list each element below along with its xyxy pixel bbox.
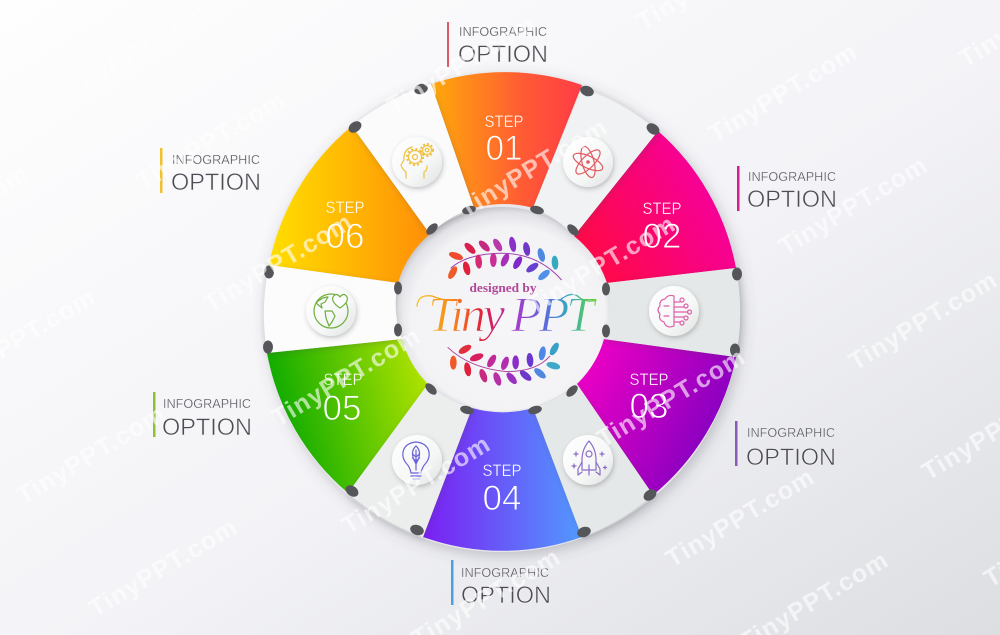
option: top: INFOGRAPHIC [459,24,547,39]
step 05 label: 05 [322,389,362,428]
step 06 label [326,198,364,256]
option: lower left: OPTION [162,414,252,441]
icon badges [306,137,699,485]
panel: bulb [348,384,472,537]
watermarks: TinyPPT.com [592,343,750,453]
script swashes [417,294,596,306]
option: lower left [153,392,252,441]
upper laurel [446,236,562,282]
watermarks: TinyPPT.com [337,430,495,540]
step 04 label: 04 [482,479,522,518]
step 02 label: STEP [642,199,682,218]
panel: rocket [533,384,653,537]
icon: atom [563,137,613,187]
step 01 label [484,112,524,168]
icon: globe with heart [306,286,356,336]
icon: head with gears [392,137,442,187]
panel: atom [533,88,658,236]
step 01 label: 01 [486,129,522,168]
step labels [322,112,682,518]
step 03 label: STEP [630,370,668,389]
option: bottom: OPTION [461,582,551,609]
step 05 label [322,370,362,428]
step 03 label [630,370,668,426]
segment: step 02 [574,131,736,283]
Tiny PPT script: Tiny PPT [428,286,597,342]
icon: leaf bulb [392,435,442,485]
step 04 label [482,461,522,518]
watermarks: TinyPPT.com [844,266,1000,376]
option: upper right: INFOGRAPHIC [748,169,836,184]
step 06 label: STEP [326,198,364,217]
segment: step 04 [423,408,582,551]
option: upper right: OPTION [747,186,837,213]
option: top [447,22,548,68]
option: upper left: OPTION [171,169,261,196]
wheel base shadow [264,72,740,552]
step 02 label [642,199,682,256]
option: lower right: INFOGRAPHIC [747,425,835,440]
option: lower right: OPTION [746,444,836,471]
step 06 label: 06 [326,217,364,256]
icon: circuit brain [649,286,699,336]
option: bottom [451,560,551,609]
option: upper right [737,166,837,213]
panel: brain [604,268,740,357]
watermarks: TinyPPT.com [84,513,242,623]
watermarks: TinyPPT.com [12,400,170,510]
segment: step 05 [267,339,428,493]
watermarks: TinyPPT.com [522,210,680,320]
step segments [267,72,736,551]
panel: globe [264,265,402,353]
corner tabs [263,82,742,539]
icon panels [264,84,740,537]
icon: rocket [563,435,613,485]
center hub disc [394,207,610,411]
center logo [417,236,597,387]
watermarks: TinyPPT.com [199,208,357,318]
option: lower right [735,421,836,471]
option: upper left: INFOGRAPHIC [172,152,260,167]
step 05 label: STEP [324,370,362,389]
option: top: OPTION [458,41,548,68]
watermarks: TinyPPT.com [454,113,612,223]
option labels [153,22,837,609]
watermarks: TinyPPT.com [704,38,862,148]
option: lower left: INFOGRAPHIC [163,396,251,411]
step 01 label: STEP [484,112,524,131]
step 04 label: STEP [482,461,522,480]
segment: step 03 [577,339,736,495]
watermarks: TinyPPT.com [132,86,290,196]
watermarks: TinyPPT.com [267,322,425,432]
step 02 label: 02 [642,217,682,256]
watermarks: TinyPPT.com [774,151,932,261]
option: bottom: INFOGRAPHIC [461,565,549,580]
option: upper left [160,148,261,196]
watermarks: TinyPPT.com [661,463,819,573]
designed by: designed by [470,280,537,295]
watermarks: TinyPPT.com [382,10,540,120]
segment: step 06 [269,126,430,283]
lower laurel [448,341,561,387]
segment: step 01 [431,72,582,208]
step 03 label: 03 [630,387,668,426]
panel: head [352,84,474,234]
watermarks: TinyPPT.com [54,0,212,108]
